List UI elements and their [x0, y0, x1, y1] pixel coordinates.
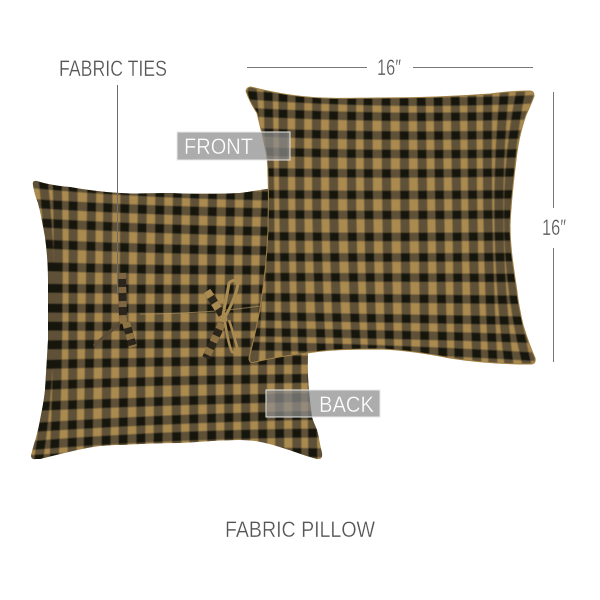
caption: FABRIC PILLOW: [225, 517, 375, 542]
fabric ties label: FABRIC TIES: [59, 56, 167, 81]
back pillow: [31, 180, 322, 460]
fabric ties leader line: [116, 85, 118, 295]
front pillow: [246, 86, 536, 364]
back seam: [140, 305, 268, 314]
height dimension: 16 inches: 16″: [542, 215, 566, 240]
fabric tie: right: [206, 280, 239, 358]
back label: [266, 390, 380, 417]
back label: BACK: [319, 392, 374, 417]
front label: FRONT: [184, 134, 253, 159]
fabric tie: left: [94, 273, 133, 347]
width dimension: 16 inches: 16″: [377, 55, 401, 80]
front label: [177, 132, 290, 160]
front pillow piping: [246, 87, 535, 364]
